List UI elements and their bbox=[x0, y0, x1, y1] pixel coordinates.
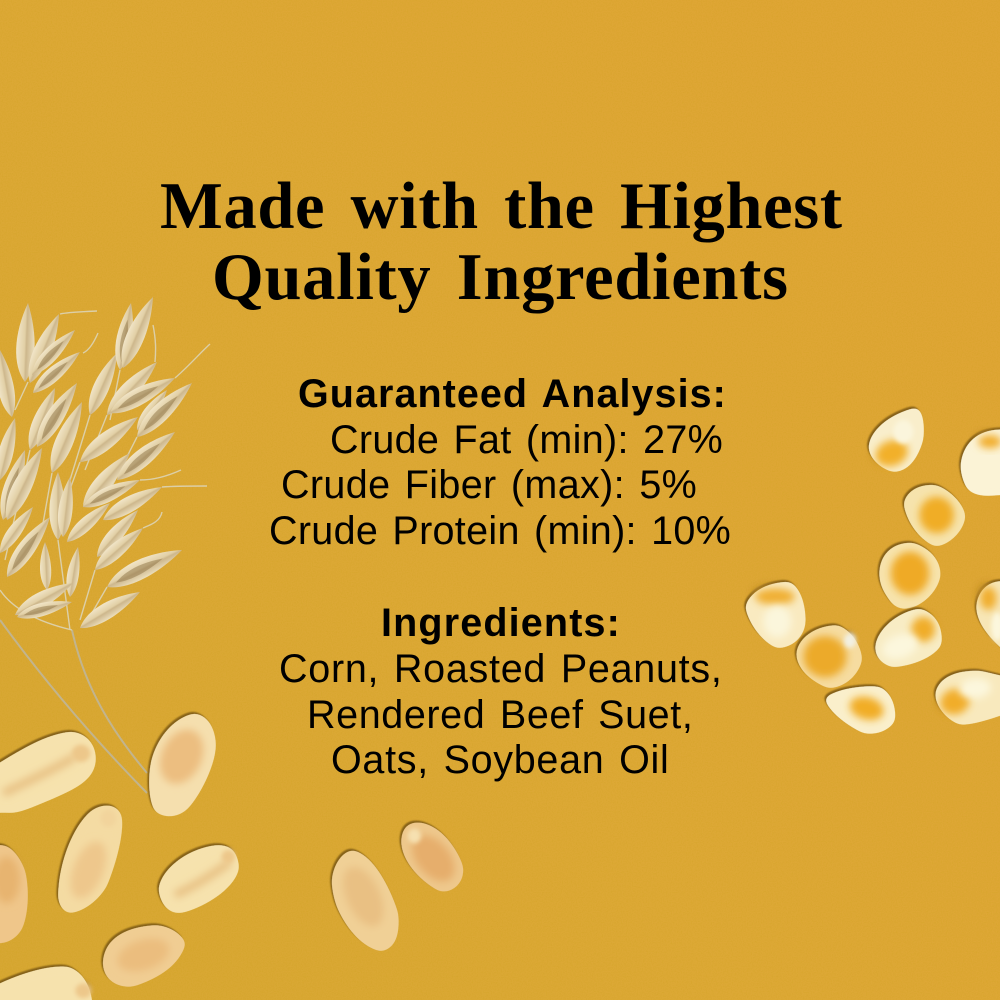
kernel 4 bbox=[879, 543, 941, 609]
text block: ingredients: Corn, Roasted Peanuts, bbox=[279, 647, 722, 691]
kernel 6 bbox=[796, 625, 862, 688]
kernel 5 bbox=[745, 582, 806, 648]
text block: ingredients bbox=[279, 601, 722, 782]
peanut 1 bbox=[0, 732, 96, 813]
kernel 8 bbox=[824, 686, 895, 734]
kernel 2 bbox=[961, 429, 1000, 496]
kernel 10 bbox=[935, 671, 1000, 725]
title bbox=[160, 170, 842, 314]
text block: guaranteed analysis: Crude Fiber (max): 5% bbox=[281, 463, 697, 507]
peanut 8 bbox=[332, 850, 399, 952]
icon: oat sprig bbox=[0, 293, 210, 793]
text block: ingredients: Ingredients: bbox=[381, 601, 620, 645]
kernel 1 bbox=[868, 407, 924, 472]
peanut 9 bbox=[401, 822, 463, 892]
icon: peanuts bbox=[0, 713, 463, 1000]
text block: guaranteed analysis bbox=[269, 372, 731, 553]
kernel 3 bbox=[903, 485, 966, 547]
peanut 6 bbox=[103, 925, 186, 987]
peanut 7 bbox=[0, 966, 93, 1000]
title: Made with the Highest bbox=[160, 170, 842, 243]
title: Quality Ingredients bbox=[212, 241, 788, 314]
peanut 5 bbox=[158, 845, 239, 913]
text block: guaranteed analysis: Crude Fat (min): 27% bbox=[330, 418, 723, 462]
text block: guaranteed analysis: Crude Protein (min): 10% bbox=[269, 509, 731, 553]
kernel 7 bbox=[875, 608, 942, 667]
text block: guaranteed analysis: Guaranteed Analysis: bbox=[298, 372, 726, 416]
peanut 4 bbox=[0, 845, 28, 943]
icon: corn kernels bbox=[745, 407, 1000, 734]
kernel 9 bbox=[976, 581, 1000, 663]
text block: ingredients: Rendered Beef Suet, bbox=[307, 693, 693, 737]
text block: ingredients: Oats, Soybean Oil bbox=[331, 738, 669, 782]
peanut 3 bbox=[58, 805, 122, 913]
peanut 2 bbox=[149, 713, 216, 816]
